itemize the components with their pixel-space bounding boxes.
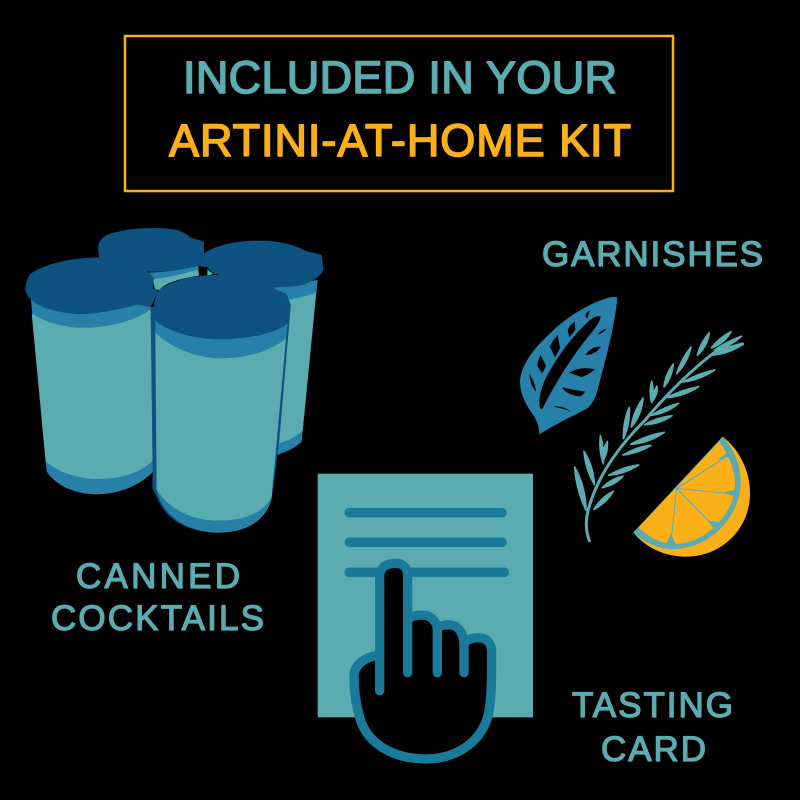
card sheet xyxy=(318,474,533,717)
card text lines xyxy=(349,513,504,572)
label: canned cocktails: COCKTAILS xyxy=(51,599,264,638)
icon: pointing hand xyxy=(354,563,492,759)
label: canned cocktails xyxy=(51,557,264,638)
label: tasting card: TASTING xyxy=(572,686,733,725)
icon: rosemary sprig xyxy=(575,332,743,541)
can: back left xyxy=(98,228,204,290)
title box xyxy=(125,36,673,191)
needles xyxy=(575,332,743,510)
can: front xyxy=(151,275,291,533)
icon: orange slice xyxy=(633,437,750,557)
label: garnishes: GARNISHES xyxy=(542,235,763,274)
stem xyxy=(586,344,743,541)
can: back right xyxy=(199,241,323,455)
title line 1: INCLUDED IN YOUR xyxy=(183,52,617,103)
label: canned cocktails: CANNED xyxy=(76,557,240,596)
label: tasting card: CARD xyxy=(601,730,706,769)
icon: mint leaf xyxy=(520,297,617,434)
label: tasting card xyxy=(572,686,733,769)
icon: canned cocktails xyxy=(25,228,323,533)
can: front left xyxy=(25,257,158,494)
title line 2: ARTINI-AT-HOME KIT xyxy=(169,115,631,166)
icon: tasting card xyxy=(318,474,533,759)
